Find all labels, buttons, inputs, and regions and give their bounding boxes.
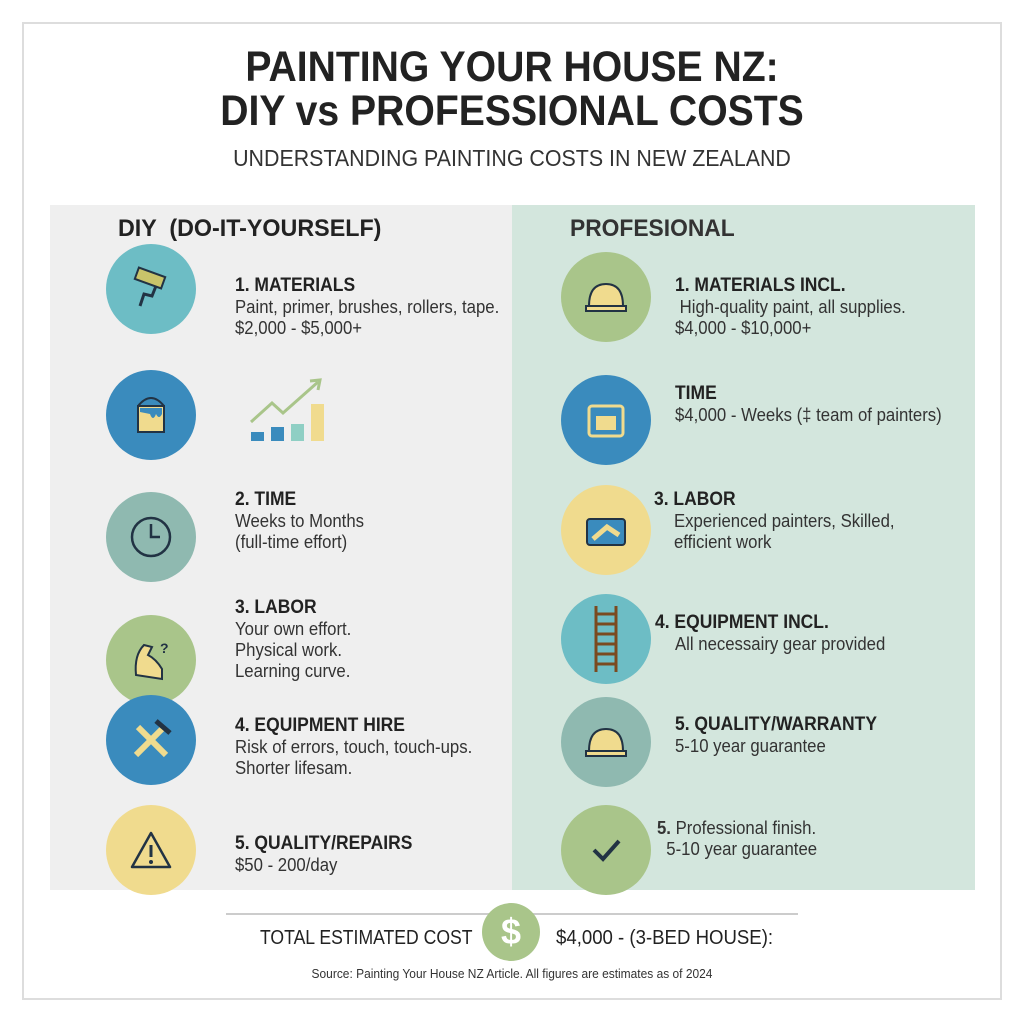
item labor: Physical work. — [235, 640, 342, 660]
item labor: 3. LABOR — [654, 489, 736, 510]
item time: 2. TIME — [235, 489, 296, 510]
icon: check — [561, 805, 651, 895]
item materials incl: 1. MATERIALS INCL. — [675, 275, 846, 296]
icon: helmet — [561, 252, 651, 342]
source: Source: Painting Your House NZ Article. All figures are estimates as of 2024 — [312, 966, 712, 981]
chart icon — [250, 378, 324, 441]
title — [220, 43, 804, 135]
item equipment incl — [655, 612, 885, 654]
item labor: 3. LABOR — [235, 597, 317, 618]
icon: arm — [106, 615, 196, 705]
item labor: Your own effort. — [235, 619, 351, 639]
item quality warranty — [675, 714, 877, 756]
item professional finish — [657, 818, 817, 859]
total label: TOTAL ESTIMATED COST — [260, 927, 473, 949]
item labor: Learning curve. — [235, 661, 350, 681]
total bar — [226, 903, 798, 961]
icon: roller — [106, 244, 196, 334]
item materials: 1. MATERIALS — [235, 275, 355, 296]
item time: (full-time effort) — [235, 532, 347, 552]
item quality: $50 - 200/day — [235, 855, 337, 875]
item labor: Experienced painters, Skilled, — [674, 511, 895, 531]
item labor — [654, 489, 895, 552]
icon: ladder — [561, 594, 651, 684]
icon: dollar: $ — [501, 911, 521, 952]
item labor — [235, 597, 351, 681]
item materials: Paint, primer, brushes, rollers, tape. — [235, 297, 499, 317]
item equipment: 4. EQUIPMENT HIRE — [235, 715, 405, 736]
total value: $4,000 - (3-BED HOUSE): — [556, 927, 773, 949]
item quality warranty: 5. QUALITY/WARRANTY — [675, 714, 877, 735]
item equipment incl: All necessairy gear provided — [675, 634, 885, 654]
item materials incl: $4,000 - $10,000+ — [675, 318, 811, 338]
icon: arm: ? — [160, 640, 169, 656]
icon: handshake — [561, 485, 651, 575]
icon: warning — [106, 805, 196, 895]
item equipment — [235, 715, 472, 778]
item time: Weeks to Months — [235, 511, 364, 531]
item time: TIME — [675, 383, 717, 404]
item equipment: Shorter lifesam. — [235, 758, 352, 778]
panel: Professional — [512, 205, 975, 890]
item labor: efficient work — [674, 532, 771, 552]
item equipment: Risk of errors, touch, touch-ups. — [235, 737, 472, 757]
item equipment incl: 4. EQUIPMENT INCL. — [655, 612, 829, 633]
item quality — [235, 833, 412, 875]
item professional finish: 5-10 year guarantee — [666, 839, 817, 859]
item materials incl: High-quality paint, all supplies. — [680, 297, 906, 317]
subtitle: UNDERSTANDING PAINTING COSTS IN NEW ZEALAND — [233, 145, 791, 171]
icon: tools — [106, 695, 196, 785]
icon: helmet 2 — [561, 697, 651, 787]
item materials — [235, 275, 499, 338]
title: PAINTING YOUR HOUSE NZ: — [245, 43, 779, 91]
item time — [235, 489, 364, 552]
heading DIY: DIY (DO-IT-YOURSELF) — [118, 215, 381, 242]
icon: calendar — [561, 375, 651, 465]
heading Professional: PROFESIONAL — [570, 215, 735, 242]
panel: DIY — [50, 205, 512, 890]
icon: clock — [106, 492, 196, 582]
item professional finish: 5. Professional finish. — [657, 818, 816, 838]
icon: dollar — [482, 903, 540, 961]
item quality: 5. QUALITY/REPAIRS — [235, 833, 412, 854]
item materials incl — [675, 275, 906, 338]
item quality warranty: 5-10 year guarantee — [675, 736, 826, 756]
item time — [675, 383, 942, 425]
title: DIY vs PROFESSIONAL COSTS — [220, 87, 804, 135]
item materials: $2,000 - $5,000+ — [235, 318, 362, 338]
item time: $4,000 - Weeks (‡ team of painters) — [675, 405, 942, 425]
icon: paint can — [106, 370, 196, 460]
